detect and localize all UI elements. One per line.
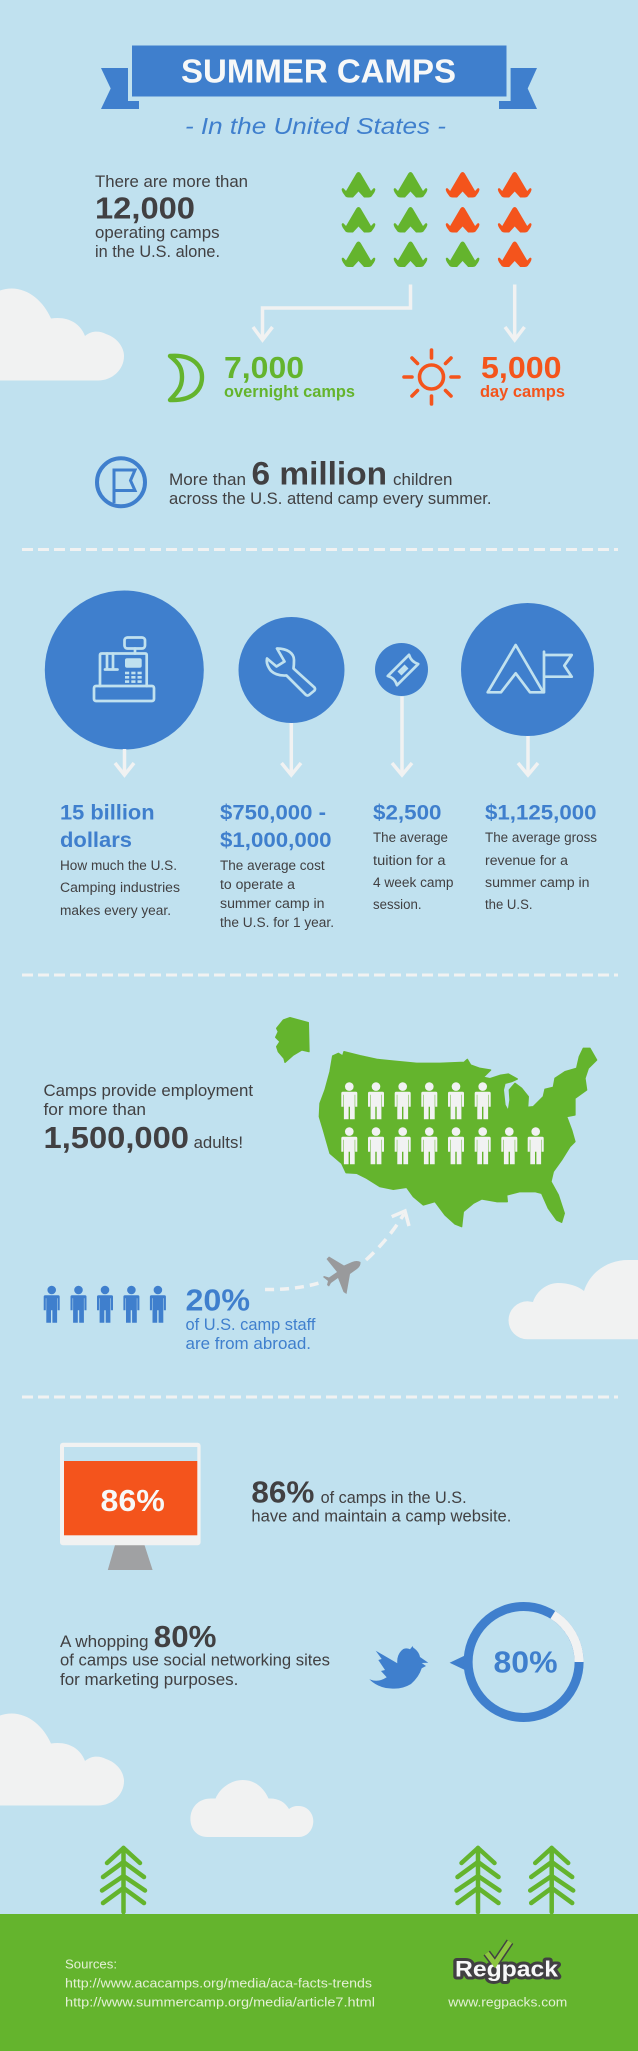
text: tuition: tuition for a	[373, 853, 446, 868]
text: 86% website: have and maintain a camp website.	[251, 1508, 511, 1526]
icon: tree left	[102, 1848, 145, 1912]
circle: wrench	[238, 617, 344, 723]
text: 20% from abroad: of U.S. camp staff	[186, 1316, 316, 1334]
text: operating cost: $750,000 -	[220, 801, 326, 824]
title banner: SUMMER CAMPS	[181, 53, 456, 90]
icon: monitor 86%: 86%	[100, 1483, 165, 1518]
text: 15 billion dollars: makes every year.	[60, 903, 171, 918]
text: 12,000 operating camps	[95, 172, 248, 261]
icon grid: tents	[342, 172, 532, 267]
text: operating cost: $1,000,000	[220, 829, 332, 852]
cloud top left	[0, 289, 124, 380]
arrow to day camps	[505, 284, 524, 340]
text: 86% website: 86%	[251, 1474, 314, 1510]
text: gross revenue: the U.S.	[485, 897, 532, 912]
stat: day camps: 5,000	[481, 350, 562, 385]
icon: monitor 86%	[60, 1443, 201, 1570]
text: 15 billion dollars: Camping industries	[60, 880, 180, 895]
text: operating cost	[220, 801, 334, 930]
text: 12,000 operating camps: There are more than	[95, 172, 248, 191]
chart: 80% ring callout: 80%	[494, 1645, 558, 1680]
text: 6 million children: 6 million	[252, 456, 387, 492]
subtitle: - In the United States -	[185, 113, 446, 139]
text: 12,000 operating camps: 12,000	[95, 191, 195, 226]
text: tuition	[373, 801, 454, 912]
text: gross revenue	[485, 801, 597, 912]
logo: Regpack	[455, 1942, 559, 1982]
icon: tree right 1	[456, 1848, 500, 1912]
text: sources: http://www.summercamp.org/media/article7.html	[65, 1994, 375, 2010]
logo: Regpack: Regpack	[455, 1957, 559, 1982]
dashed flight arrow	[265, 1211, 409, 1290]
icon: airplane	[323, 1256, 361, 1294]
text: operating cost: summer camp in	[220, 896, 324, 911]
text: 86% website	[251, 1474, 511, 1526]
icon: flag in circle	[97, 458, 145, 506]
text: 12,000 operating camps: in the U.S. alone.	[95, 242, 220, 261]
stat: day camps: day camps	[480, 382, 565, 401]
arrow: column 2	[282, 723, 301, 775]
title banner	[101, 46, 537, 109]
text: employment: 1,500,000	[44, 1120, 189, 1155]
arrow: column 3	[392, 696, 412, 775]
text: 80% social networking: 80%	[154, 1619, 216, 1654]
text: tuition: The average	[373, 830, 448, 845]
text: 6 million children: across the U.S. attend camp every summer.	[169, 489, 492, 508]
text: operating cost: the U.S. for 1 year.	[220, 915, 334, 930]
text: operating cost: The average cost	[220, 858, 325, 873]
text: website url: www.regpacks.com	[447, 1994, 567, 2010]
icon: twitter bird	[369, 1646, 428, 1689]
pictogram: people on map	[341, 1082, 544, 1164]
text: 6 million children: children	[393, 470, 452, 489]
pictogram: blue people	[44, 1286, 166, 1323]
text: 80% social networking: of camps use social networking sites	[60, 1652, 330, 1670]
text: 12,000 operating camps: operating camps	[95, 223, 220, 242]
circle: tent and flag	[461, 603, 594, 736]
arrow: column 4	[518, 736, 538, 775]
text: 20% from abroad: 20%	[186, 1283, 250, 1318]
text: 20% from abroad: are from abroad.	[186, 1335, 311, 1353]
text: 80% social networking: for marketing purposes.	[60, 1671, 238, 1689]
text: gross revenue: $1,125,000	[485, 801, 596, 824]
text: operating cost: to operate a	[220, 877, 296, 892]
text: 20% from abroad	[186, 1283, 316, 1353]
map: Alaska	[276, 1018, 309, 1062]
text: 15 billion dollars	[60, 801, 180, 918]
text: employment: Camps provide employment	[44, 1082, 253, 1100]
text: gross revenue: revenue for a	[485, 853, 568, 868]
chart: 80% ring callout	[450, 1606, 579, 1718]
panel: ground footer	[0, 1914, 638, 2051]
text: tuition: $2,500	[373, 801, 442, 824]
stat: overnight camps: 7,000	[224, 350, 304, 385]
circle: cash register	[45, 590, 204, 750]
stat: overnight camps: overnight camps	[224, 382, 355, 401]
text: 15 billion dollars: How much the U.S.	[60, 858, 177, 873]
text: 80% social networking	[60, 1619, 330, 1689]
arrow: column 1	[115, 749, 134, 775]
text: gross revenue: summer camp in	[485, 875, 590, 890]
stat: overnight camps	[224, 350, 355, 401]
cloud lower left	[0, 1714, 124, 1806]
text: 6 million children: More than	[169, 470, 246, 489]
cloud right	[509, 1260, 638, 1339]
circle: ticket	[375, 643, 428, 696]
text: 6 million children	[169, 456, 492, 508]
text: sources	[65, 1957, 375, 2010]
text: employment: adults!	[194, 1134, 243, 1152]
text: 80% social networking: A whopping	[60, 1633, 148, 1651]
text: tuition: session.	[373, 897, 422, 912]
stat: day camps	[480, 350, 565, 401]
cloud lower centre	[190, 1780, 313, 1837]
text: sources: Sources:	[65, 1957, 117, 1972]
text: 86% website: of camps in the U.S.	[321, 1489, 467, 1507]
text: employment: for more than	[44, 1101, 146, 1119]
text: tuition: 4 week camp	[373, 875, 454, 890]
text: employment	[44, 1082, 253, 1155]
icon: tree right 2	[530, 1848, 573, 1912]
text: sources: http://www.acacamps.org/media/aca-facts-trends	[65, 1975, 373, 1990]
map: contiguous United States	[319, 1048, 597, 1227]
arrow to overnight camps	[253, 284, 410, 340]
text: gross revenue: The average gross	[485, 830, 597, 845]
text: 15 billion dollars: 15 billion	[60, 801, 155, 824]
icon: moon	[170, 356, 202, 400]
icon: sun	[404, 350, 459, 404]
text: 15 billion dollars: dollars	[60, 829, 132, 852]
